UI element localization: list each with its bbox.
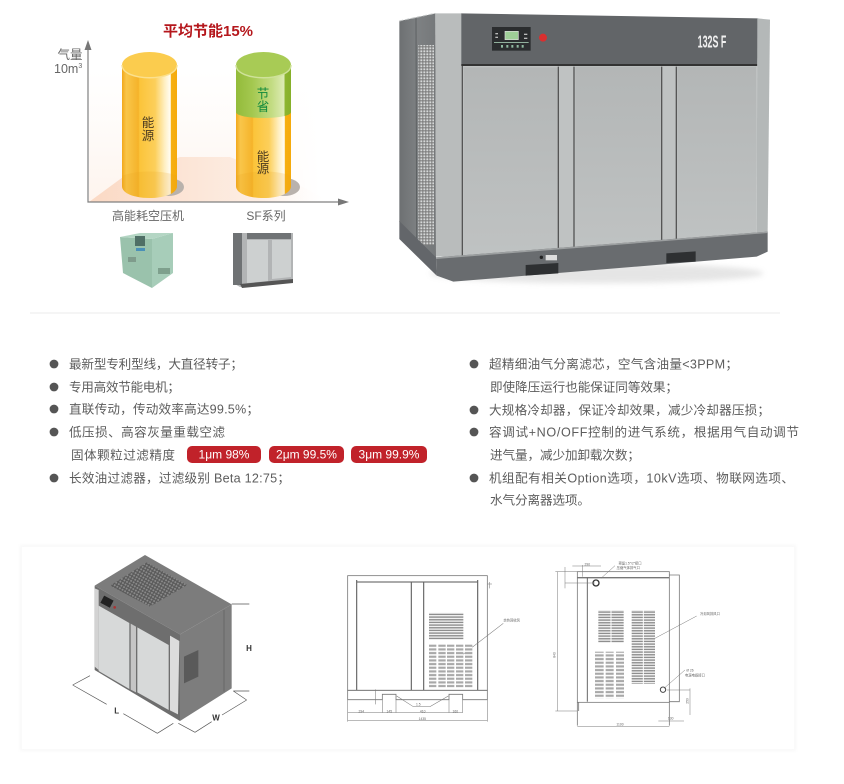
front face xyxy=(95,586,180,721)
roof mesh xyxy=(110,562,187,607)
divider card edge xyxy=(30,312,780,314)
cylinder: high energy compressor: 能 xyxy=(142,116,155,130)
badge: 2 micron xyxy=(269,446,344,463)
feature 9: 机组配有相关Option选项，10kV选项、物联网选项、 xyxy=(489,472,794,486)
isometric dimension drawing: H xyxy=(246,644,252,653)
feature 3: 直联传动，传动效率高达99.5%； xyxy=(69,402,259,418)
door 2 xyxy=(575,67,661,247)
cylinder: high energy compressor xyxy=(122,52,177,198)
category labels xyxy=(112,208,286,223)
front elevation drawing: 1435 xyxy=(419,717,426,721)
control panel xyxy=(492,27,531,51)
front elevation drawing: 294 xyxy=(359,710,364,714)
y axis label: 3 xyxy=(78,63,82,70)
side elevation drawing: 250 xyxy=(685,698,689,704)
panel: main compressor 132SF xyxy=(399,13,770,283)
panel: features left column xyxy=(50,356,427,486)
icon: green compressor xyxy=(120,233,173,288)
feature 8 xyxy=(470,424,799,464)
feature 8: 进气量，减少加卸载次数； xyxy=(490,448,640,464)
category labels: SF系列 xyxy=(246,209,286,223)
badge: 3 micron: 3μm 99.9% xyxy=(359,448,420,462)
y axis label: 气量 xyxy=(57,47,83,62)
icon: grey compressor xyxy=(233,233,293,288)
isometric dimension drawing: L xyxy=(114,707,119,716)
feature 6: 即使降压运行也能保证同等效果； xyxy=(490,380,678,396)
feature 5: 长效油过滤器，过滤级别 Beta 12:75； xyxy=(69,472,290,486)
isometric dimension drawing: W xyxy=(212,714,220,723)
feature 4: 低压损、高容灰量重载空滤 xyxy=(69,424,225,440)
feature 7: 大规格冷却器，保证冷却效果，减少冷却器压损； xyxy=(489,402,770,418)
door gaps xyxy=(461,65,757,257)
cylinder: SF series: 省 xyxy=(257,100,269,114)
badge: 2 micron: 2μm 99.5% xyxy=(276,448,337,462)
front elevation drawing xyxy=(348,576,521,722)
side elevation drawing: 130 xyxy=(668,717,674,721)
cylinder: SF series: 源 xyxy=(257,162,270,176)
side elevation drawing: 290 xyxy=(585,563,590,567)
cylinder: SF series: 节 xyxy=(257,87,269,101)
emergency stop button xyxy=(539,34,547,42)
door frame xyxy=(461,64,757,258)
category labels: 高能耗空压机 xyxy=(112,208,184,223)
y axis label xyxy=(54,47,83,76)
front elevation drawing: 145 xyxy=(387,710,392,714)
axes xyxy=(84,40,349,206)
feature 9 xyxy=(470,472,794,508)
door 1 xyxy=(464,67,558,256)
card background xyxy=(20,545,796,751)
ground shadow xyxy=(430,263,763,283)
side elevation drawing: 电源电缆接口 xyxy=(685,672,705,677)
front elevation drawing: 余热回收风 xyxy=(503,617,521,622)
side elevation drawing: 1100 xyxy=(616,723,624,727)
feature 1: 最新型专利型线，大直径转子； xyxy=(69,356,243,372)
feature 6: 超精细油气分离滤芯，空气含油量<3PPM； xyxy=(489,356,738,372)
badge: 1 micron: 1μm 98% xyxy=(199,448,250,462)
cylinder: SF series: 能 xyxy=(257,150,270,164)
side elevation drawing: Ø 26 xyxy=(686,668,694,672)
base xyxy=(399,221,768,282)
side elevation drawing xyxy=(552,560,720,727)
feature 2: 专用高效节能电机； xyxy=(69,380,180,396)
chart title: 平均节能15% xyxy=(163,22,253,40)
corner pillar xyxy=(435,13,462,257)
side elevation drawing: 843 xyxy=(552,652,556,658)
chart backdrop xyxy=(89,70,330,202)
side elevation drawing: 预留1.5″/2″接口 xyxy=(618,560,642,565)
feature 8: 容调试+NO/OFF控制的进气系统，根据用气自动调节 xyxy=(489,424,799,440)
badge: 3 micron xyxy=(351,446,427,463)
feature 6 xyxy=(470,356,738,396)
cylinder: SF series xyxy=(236,52,291,198)
panel: energy saving chart xyxy=(54,22,349,288)
side elevation drawing: 压缩气体排气口 xyxy=(617,565,640,570)
right pillar xyxy=(757,18,770,234)
front elevation drawing: 160 xyxy=(453,710,458,714)
left side xyxy=(399,13,436,258)
top face xyxy=(95,555,232,634)
y axis label: 10m xyxy=(54,62,78,76)
filter precision label: 固体颗粒过滤精度 xyxy=(71,448,175,462)
dimension lines and letters xyxy=(73,604,249,733)
badge: 1 micron xyxy=(187,446,261,463)
panel: features right column xyxy=(470,356,799,508)
door 3 xyxy=(677,67,756,240)
feature 9: 水气分离器选项。 xyxy=(490,492,590,508)
panel: dimensions card xyxy=(20,545,796,751)
front elevation drawing: 410 xyxy=(420,710,426,714)
side elevation drawing: 冷却风排风口 xyxy=(700,611,720,616)
front elevation drawing: 1.5 xyxy=(416,703,421,707)
side face xyxy=(180,604,232,721)
cylinder: high energy compressor: 源 xyxy=(142,129,155,143)
panel: main compressor 132SF: 132S F xyxy=(698,32,726,52)
isometric dimension drawing xyxy=(73,555,252,733)
top band xyxy=(461,13,758,66)
